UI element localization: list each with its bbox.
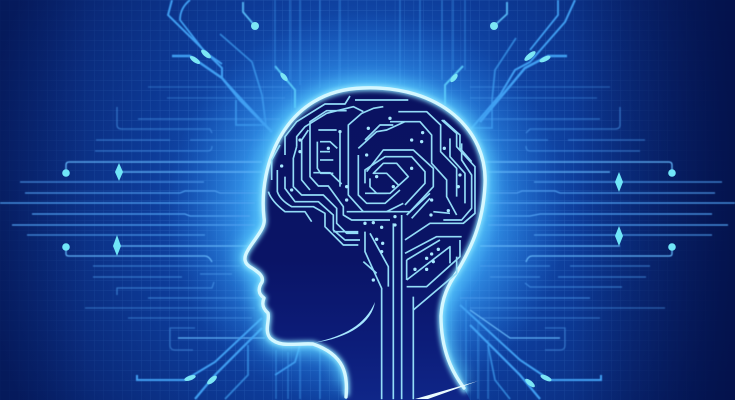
head silhouette fill: [245, 88, 485, 400]
bottom right nodes: [524, 373, 552, 389]
jawline highlight: [313, 302, 375, 343]
bottom left branches: [137, 318, 320, 399]
bottom right branches: [460, 300, 601, 399]
central halo: [150, 0, 585, 400]
right circuit nodes: [615, 169, 676, 251]
right horizontal circuit lines: [460, 87, 735, 350]
head outline: [245, 88, 485, 397]
neck base highlight: [415, 381, 478, 399]
head outline inner glow: [245, 88, 485, 396]
left horizontal circuit lines: [0, 87, 290, 350]
top left nodes: [189, 22, 289, 82]
top right nodes: [449, 22, 551, 83]
head glow: [245, 88, 485, 385]
brain circuit dots: [280, 117, 462, 282]
bottom left nodes: [184, 374, 218, 386]
top left branches: [168, 0, 340, 132]
top right branches: [400, 0, 575, 130]
brain circuit traces: [268, 96, 475, 399]
left circuit nodes: [62, 163, 123, 256]
